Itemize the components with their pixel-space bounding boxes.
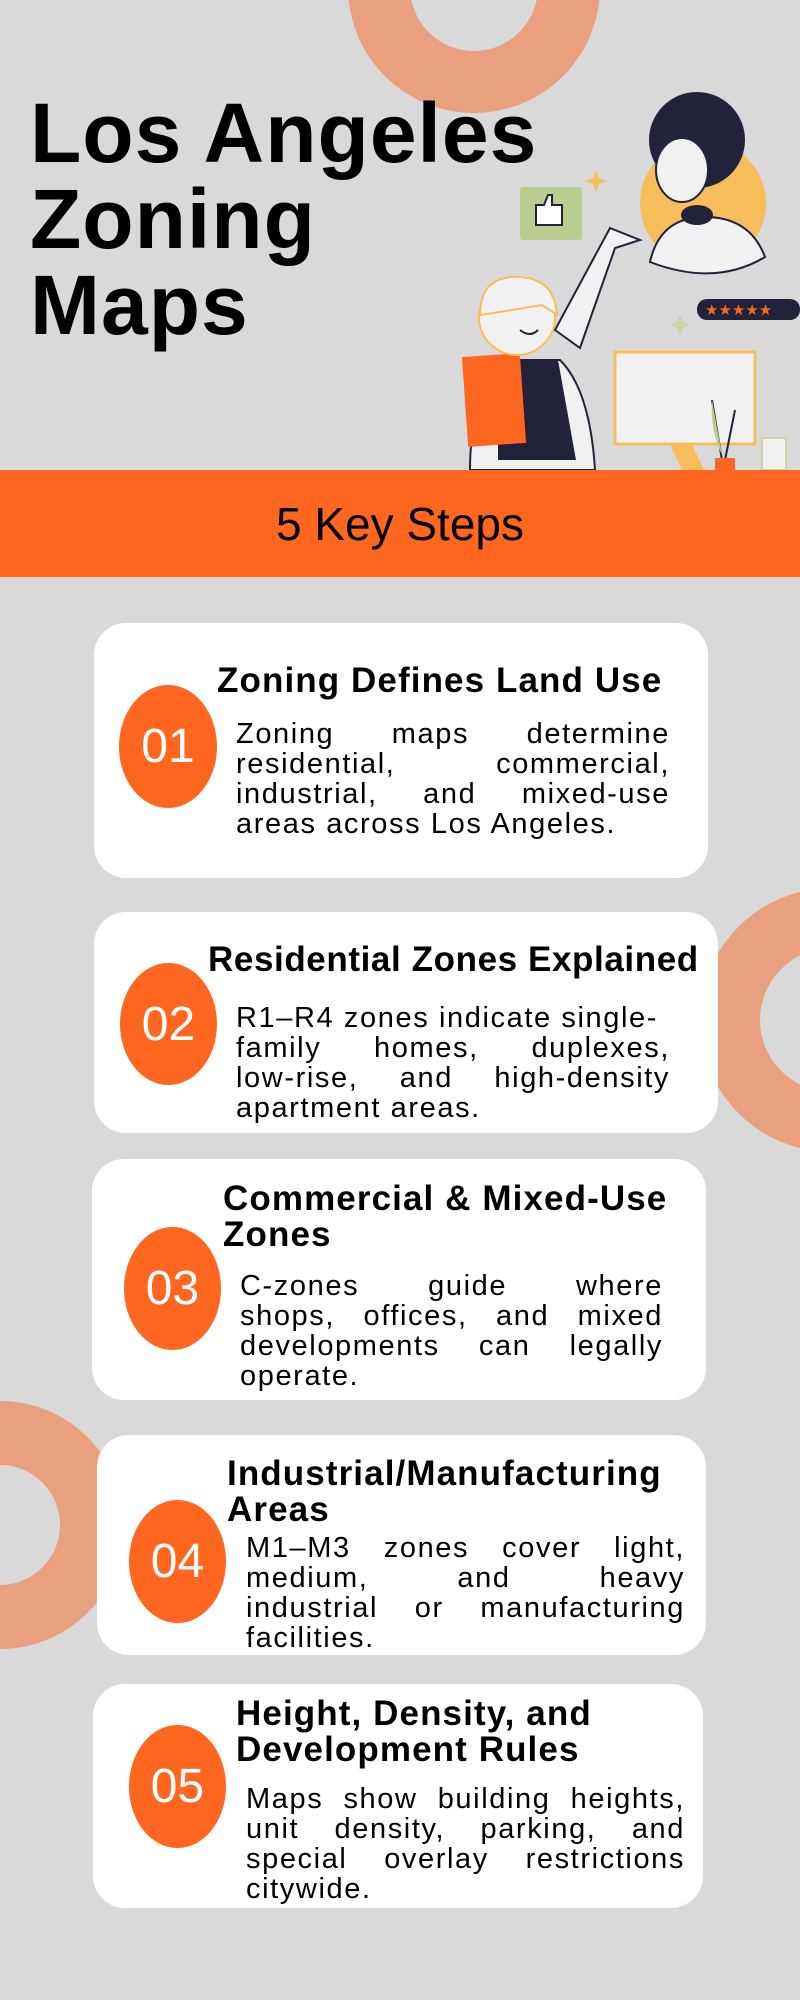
text 2: R1–R4 zones indicate single- xyxy=(236,1002,658,1034)
text 2: low-rise, and high-density xyxy=(236,1062,670,1094)
circle 03: 03 xyxy=(146,1262,199,1315)
circle 04: 04 xyxy=(151,1535,204,1588)
text 5: unit density, parking, and xyxy=(246,1813,685,1845)
text 4: facilities. xyxy=(246,1622,375,1654)
heading 1: Zoning Defines Land Use xyxy=(217,661,662,700)
heading 3 xyxy=(223,1179,667,1254)
rating stars: ★★★★★ xyxy=(705,301,772,319)
text 2: family homes, duplexes, xyxy=(236,1032,670,1064)
text 4: M1–M3 zones cover light, xyxy=(246,1532,685,1564)
text 1: industrial, and mixed-use xyxy=(236,778,670,810)
monitor xyxy=(615,352,786,470)
text 1: areas across Los Angeles. xyxy=(236,808,616,840)
text 5: citywide. xyxy=(246,1873,372,1905)
circle 02 xyxy=(120,963,217,1085)
circle 02: 02 xyxy=(142,998,195,1050)
card 3 xyxy=(92,1159,706,1400)
text 5: special overlay restrictions xyxy=(246,1843,685,1875)
text 4: medium, and heavy xyxy=(246,1562,685,1594)
text 1: residential, commercial, xyxy=(236,748,670,780)
text 3: shops, offices, and mixed xyxy=(240,1300,663,1332)
text 3: operate. xyxy=(240,1360,359,1392)
circle 01 xyxy=(119,685,217,808)
text 3: C-zones guide where xyxy=(240,1270,663,1302)
heading 3: Commercial & Mixed-Use xyxy=(223,1179,667,1218)
heading 5 xyxy=(236,1694,592,1769)
heading 5: Height, Density, and xyxy=(236,1694,592,1733)
circle 05: 05 xyxy=(151,1760,204,1813)
title: Maps xyxy=(30,258,249,352)
illustration: people high-five xyxy=(462,92,800,470)
banner: 5 Key Steps xyxy=(0,470,800,577)
text 5: Maps show building heights, xyxy=(246,1783,685,1815)
icon: thumbs up xyxy=(520,187,582,240)
circle 04 xyxy=(129,1500,226,1623)
heading 3: Zones xyxy=(223,1215,332,1254)
text 5 xyxy=(246,1783,685,1905)
circle 05 xyxy=(129,1725,226,1848)
card 2 xyxy=(94,912,718,1133)
text 2: apartment areas. xyxy=(236,1092,481,1124)
text 3: developments can legally xyxy=(240,1330,663,1362)
rating stars xyxy=(697,299,800,320)
sparkles xyxy=(585,170,690,335)
title: Los Angeles xyxy=(30,86,537,180)
card 5 xyxy=(93,1684,703,1908)
card 4 xyxy=(97,1435,706,1655)
girl xyxy=(462,228,640,470)
text 4: industrial or manufacturing xyxy=(246,1592,685,1624)
text 2 xyxy=(236,1002,670,1124)
avatar xyxy=(640,92,766,273)
title: Zoning xyxy=(30,172,316,266)
title xyxy=(30,86,537,352)
heading 5: Development Rules xyxy=(236,1730,580,1769)
heading 4: Industrial/Manufacturing xyxy=(227,1454,662,1493)
text 1 xyxy=(236,718,670,840)
banner: 5 Key Steps: 5 Key Steps xyxy=(276,498,524,550)
heading 2: Residential Zones Explained xyxy=(208,940,699,979)
text 4 xyxy=(246,1532,685,1654)
circle 01: 01 xyxy=(141,720,195,773)
card 1 xyxy=(94,623,708,878)
circle 03 xyxy=(124,1227,221,1350)
text 1: Zoning maps determine xyxy=(236,718,670,750)
text 3 xyxy=(240,1270,663,1392)
heading 4: Areas xyxy=(227,1490,330,1529)
heading 4 xyxy=(227,1454,662,1529)
